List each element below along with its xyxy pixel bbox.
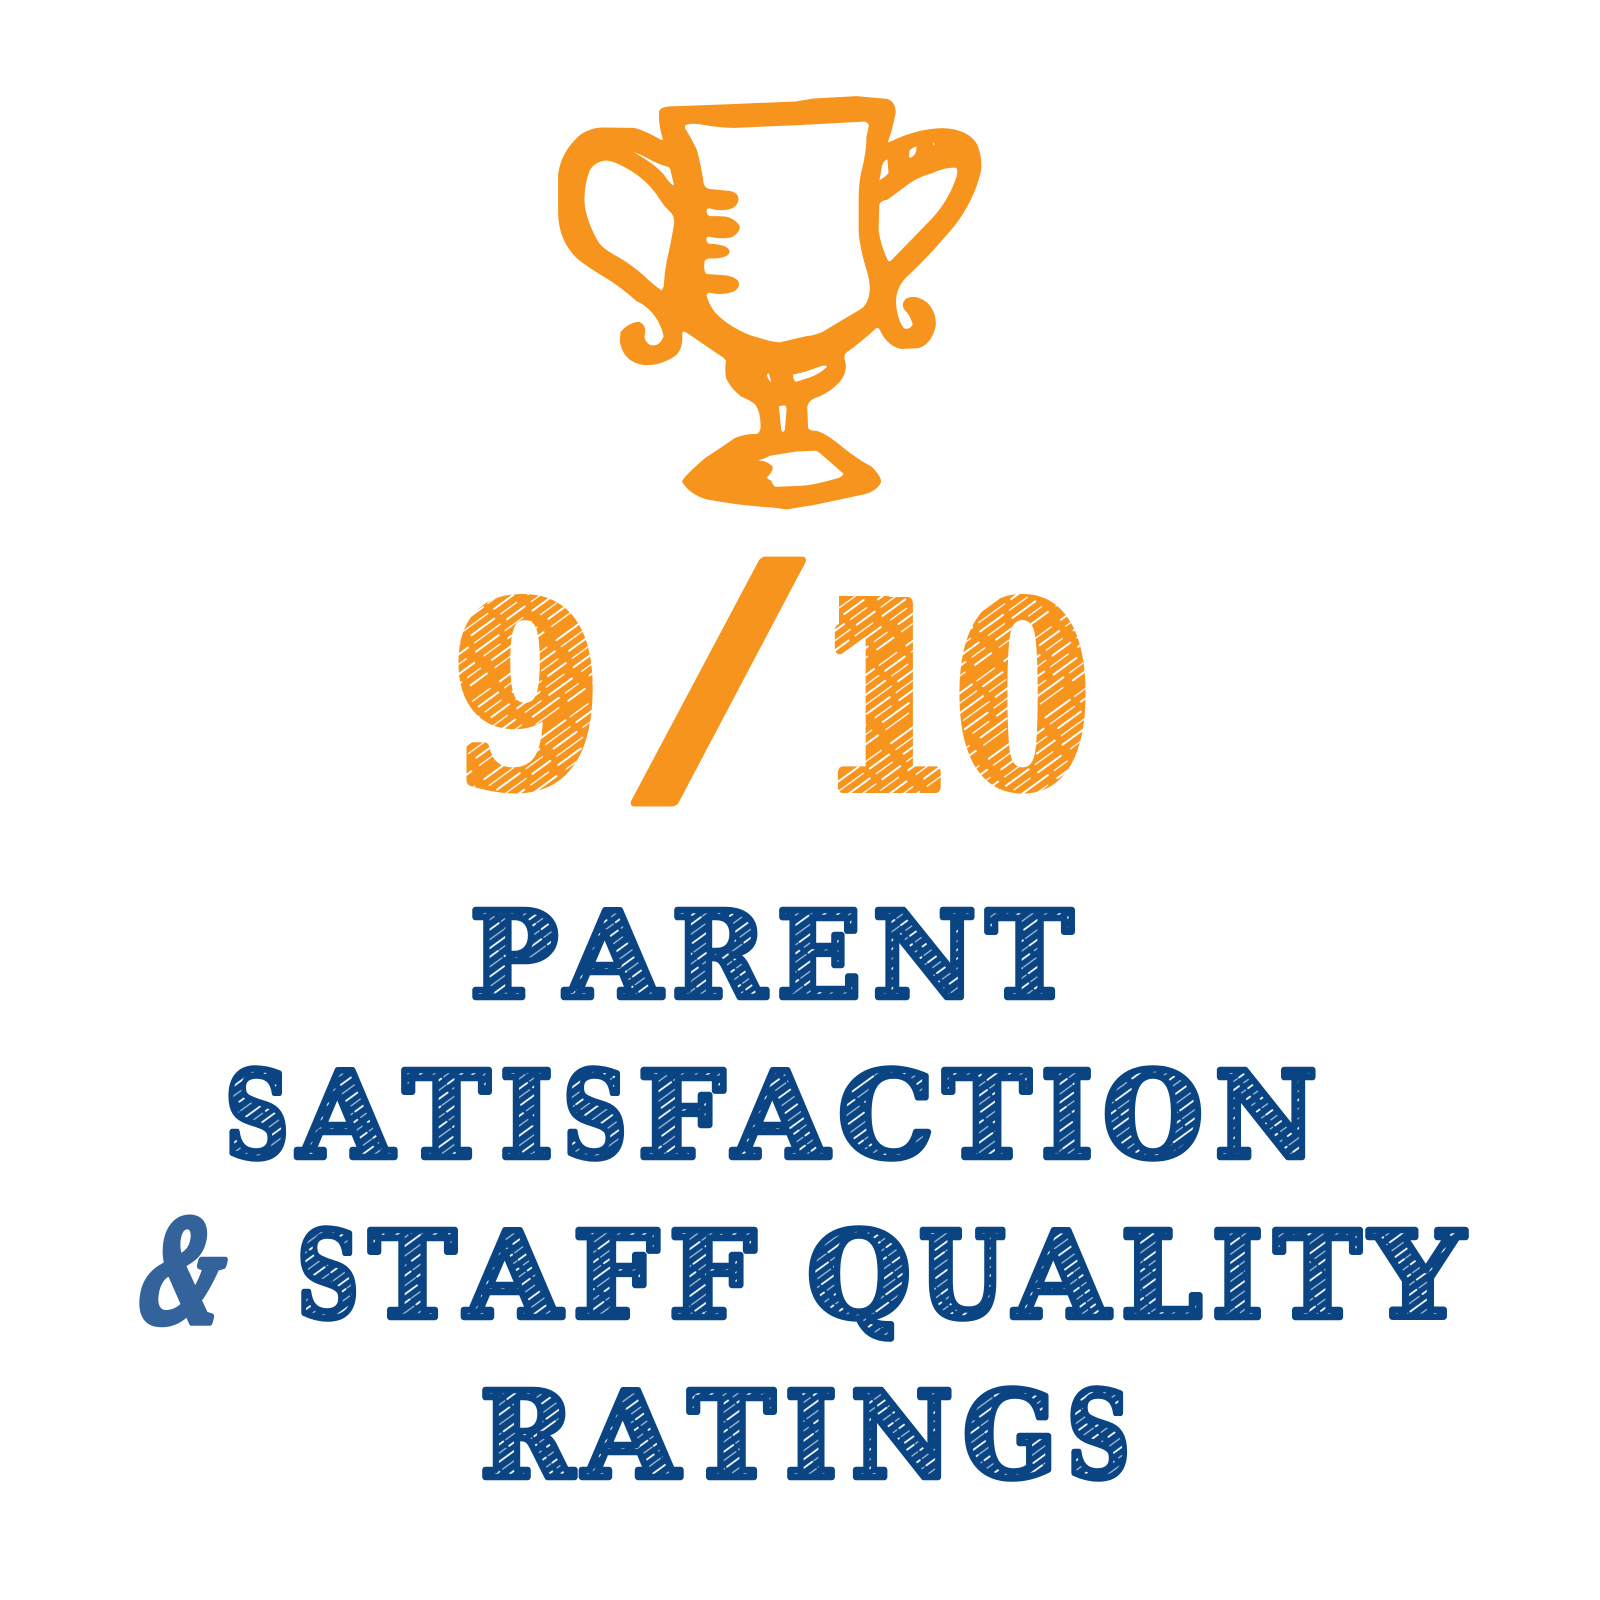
heading: parent satisfaction and staff quality ratings: N (1215, 1046, 1317, 1186)
heading: parent satisfaction and staff quality ratings: R (672, 886, 767, 1026)
heading: parent satisfaction and staff quality ratings: Y (1368, 1206, 1466, 1346)
heading: parent satisfaction and staff quality ratings: I (1212, 1206, 1263, 1346)
heading: parent satisfaction and staff quality ratings: A (464, 1206, 563, 1346)
heading: parent satisfaction and staff quality ratings: S (297, 1206, 359, 1346)
score: 9/10: / (612, 504, 825, 864)
icon: orange trophy (560, 97, 980, 508)
heading: parent satisfaction and staff quality ratings: E (777, 886, 861, 1026)
heading: parent satisfaction and staff quality ratings: A (297, 1046, 395, 1186)
heading: parent satisfaction and staff quality ratings: T (369, 1206, 456, 1346)
heading: parent satisfaction and staff quality ratings: & (131, 1183, 237, 1356)
heading: parent satisfaction and staff quality ratings: A (732, 1046, 830, 1186)
heading: parent satisfaction and staff quality ratings: O (1103, 1046, 1203, 1186)
heading: parent satisfaction and staff quality ratings: L (1121, 1206, 1202, 1346)
heading: parent satisfaction and staff quality ratings: F (573, 1206, 659, 1346)
heading: parent satisfaction and staff quality ratings: T (943, 1046, 1031, 1186)
score: 9/10: 9 (452, 552, 601, 843)
heading: parent satisfaction and staff quality ratings (131, 886, 1466, 1506)
heading: parent satisfaction and staff quality ratings: S (563, 1046, 627, 1186)
score: 9/10: 0 (955, 552, 1090, 843)
heading: parent satisfaction and staff quality ratings: U (919, 1206, 1005, 1346)
heading: parent satisfaction and staff quality ratings: T (688, 1366, 775, 1506)
heading: parent satisfaction and staff quality ratings: T (1274, 1206, 1361, 1346)
heading: parent satisfaction and staff quality ratings: A (564, 886, 663, 1026)
heading: parent satisfaction and staff quality ratings: A (582, 1366, 681, 1506)
heading: parent satisfaction and staff quality ratings: T (403, 1046, 490, 1186)
heading: parent satisfaction and staff quality ratings: N (873, 886, 976, 1026)
score: 9/10: 1 (815, 555, 956, 846)
heading: parent satisfaction and staff quality ratings: S (225, 1046, 289, 1186)
heading: parent satisfaction and staff quality ratings: C (838, 1046, 934, 1186)
heading: parent satisfaction and staff quality ratings: P (470, 886, 558, 1026)
heading: parent satisfaction and staff quality ratings: A (1013, 1206, 1111, 1346)
heading: parent satisfaction and staff quality ratings: G (963, 1366, 1057, 1506)
heading: parent satisfaction and staff quality ratings: F (638, 1046, 725, 1186)
heading: parent satisfaction and staff quality ratings: T (986, 886, 1073, 1026)
heading: parent satisfaction and staff quality ratings: S (1067, 1366, 1130, 1506)
heading: parent satisfaction and staff quality ratings: I (785, 1366, 837, 1506)
heading: parent satisfaction and staff quality ratings: N (851, 1366, 953, 1506)
heading: parent satisfaction and staff quality ratings: F (669, 1206, 756, 1346)
heading: parent satisfaction and staff quality ratings: I (500, 1046, 553, 1186)
heading: parent satisfaction and staff quality ratings: Q (807, 1206, 911, 1346)
heading: parent satisfaction and staff quality ratings: I (1041, 1046, 1093, 1186)
heading: parent satisfaction and staff quality ratings: R (480, 1366, 575, 1506)
score: 9/10 (452, 504, 1090, 864)
